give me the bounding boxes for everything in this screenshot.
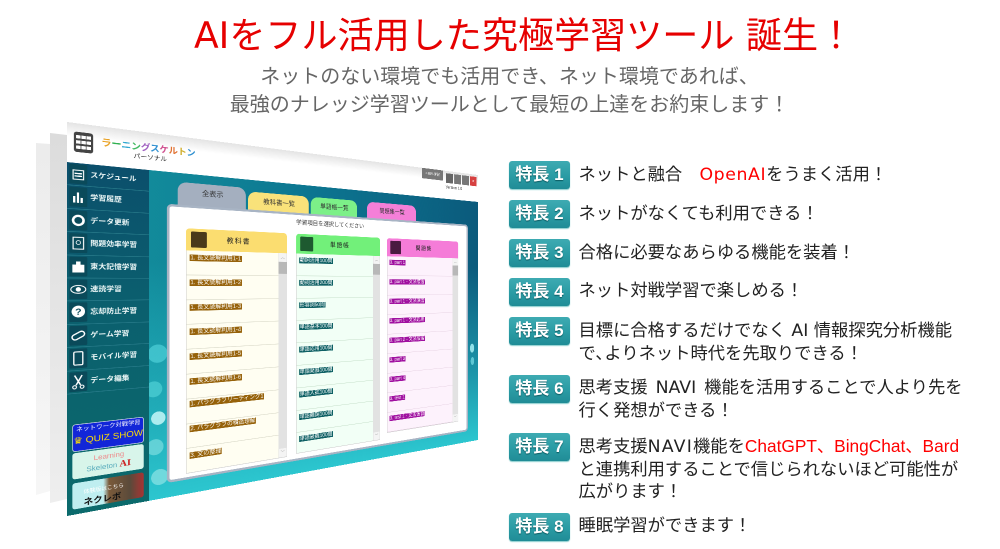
menu item: data update: データ更新 xyxy=(90,217,129,227)
app logo: パーソナル xyxy=(134,153,167,163)
tab: textbooks xyxy=(248,191,309,219)
column: questions: 3. part 2 - 文法復習 xyxy=(390,336,425,343)
window buttons: × xyxy=(472,178,475,184)
bokeh lights xyxy=(149,344,474,485)
feature 6 text xyxy=(578,378,963,421)
column header xyxy=(387,238,458,258)
feature 2 badge: 特長 2 xyxy=(515,204,564,223)
banner: nextlevel labo: 体験版はこちら xyxy=(84,482,124,495)
title: AIをフル活用した究極学習ツール 誕生！ xyxy=(194,15,854,57)
tab: all: 全表示 xyxy=(202,189,223,199)
banner: quiz show: ネットワーク対戦学習 xyxy=(76,419,140,433)
column: questions: ︿ xyxy=(454,260,457,264)
column: questions: 3. part 3 xyxy=(390,356,405,363)
column: textbooks: 1. 長文読解利用1-2 xyxy=(190,279,241,286)
window buttons: Version 1.0 xyxy=(446,185,462,191)
menu item: forget prevention: 忘却防止学習 xyxy=(90,307,137,316)
app screenshot window xyxy=(67,122,478,516)
feature 6 text: 思考支援 NAVI 機能を活用することで人より先を xyxy=(578,378,963,398)
menu item: history: 学習履歴 xyxy=(90,194,122,204)
feature 1 badge: 特長 1 xyxy=(515,165,564,184)
feature 5 text: で､よりネット時代を先取りできる！ xyxy=(578,344,863,364)
column: questions: 3. part 1 - 文法演習 xyxy=(390,298,425,304)
tab: references: 単語帳一覧 xyxy=(320,202,348,212)
subtitle xyxy=(230,66,789,116)
tab: references xyxy=(311,197,357,222)
column: textbooks: 1. 長文読解利用1-1 xyxy=(190,255,241,262)
main white panel xyxy=(167,204,468,483)
column header: 単語帳 xyxy=(330,241,350,249)
feature 5 badge xyxy=(509,317,570,345)
tab: questions: 問題集一覧 xyxy=(379,207,405,216)
feature 5 text: 目標に合格するだけでなく AI 情報探究分析機能 xyxy=(578,321,952,341)
column: textbooks: 1. 長文読解利用1-5 xyxy=(190,350,241,360)
feature 6 text: 行く発想ができる！ xyxy=(578,401,734,421)
feature 3 text: 合格に必要なあらゆる機能を装着！ xyxy=(578,243,855,263)
column: references: 形容詞50問 xyxy=(300,302,325,308)
feature 8 text: 睡眠学習ができます！ xyxy=(578,516,751,536)
column: references: ﹀ xyxy=(375,433,378,438)
menu item: schedule xyxy=(67,162,149,192)
menu item: game: ゲーム学習 xyxy=(90,330,129,339)
column: references: 単語最難100問 xyxy=(300,431,332,442)
feature 7 text xyxy=(578,436,959,502)
feature 1 badge xyxy=(509,161,570,189)
menu item: efficient study: 問題効率学習 xyxy=(90,240,137,249)
subtitle: ネットのない環境でも活用でき、ネット環境であれば、 xyxy=(260,66,759,88)
column: questions: 3. test 1 xyxy=(390,395,405,402)
column: references: 単語入試100問 xyxy=(300,388,332,397)
column: questions xyxy=(387,238,458,433)
feature 5 badge: 特長 5 xyxy=(515,321,564,340)
column: textbooks: 1. 長文読解利用1-4 xyxy=(190,327,241,335)
feature 8 badge xyxy=(509,513,570,541)
feature 2 text: ネットがなくても利用できる！ xyxy=(578,204,819,224)
column: textbooks: 1. 長文読解利用1-6 xyxy=(190,374,241,385)
menu item: forget prevention xyxy=(67,300,149,325)
menu item: data update xyxy=(67,209,149,235)
menu item: history xyxy=(67,185,149,213)
feature 5 text xyxy=(578,321,952,364)
title bar xyxy=(67,122,478,202)
menu item: schedule: スケジュール xyxy=(90,171,136,183)
menu item: memory: 東大記憶学習 xyxy=(90,263,137,271)
column: questions: 3. part 1 - 文法復習 xyxy=(390,279,425,285)
column: references: ︿ xyxy=(375,257,378,262)
column: references: 単語発展100問 xyxy=(300,366,332,375)
tab: all xyxy=(178,182,246,213)
menu item: game xyxy=(67,322,149,348)
feature 4 badge: 特長 4 xyxy=(515,282,564,301)
menu item: mobile xyxy=(67,344,149,371)
banner: learning skeleton AI xyxy=(72,444,144,480)
column: references: 動詞活用200問 xyxy=(300,280,332,286)
banner: nextlevel labo: ネクレボ xyxy=(84,491,121,507)
banner: quiz show xyxy=(72,417,144,452)
menu item: data edit: データ編集 xyxy=(90,374,129,384)
column: references: 単語応用100問 xyxy=(300,345,332,353)
feature 4 text: ネット対戦学習で楽しめる！ xyxy=(578,281,803,301)
column header xyxy=(296,234,380,256)
column header xyxy=(186,228,287,253)
feature 6 badge: 特長 6 xyxy=(515,379,564,398)
column: questions: 3. part 1 xyxy=(390,260,405,265)
banner: learning skeleton AI: Skeleton AI xyxy=(86,457,131,474)
column: questions: 3. part 4 xyxy=(390,375,405,382)
stacked window shadows xyxy=(36,133,67,503)
panel prompt: 学習項目を選択してください xyxy=(296,219,364,229)
menu item: data edit xyxy=(67,366,149,395)
column: questions: ﹀ xyxy=(454,415,457,420)
feature 1 text: ネットと融合 OpenAIをうまく活用！ xyxy=(578,165,887,185)
column: references: 単語難関100問 xyxy=(300,410,332,420)
menu item: efficient study xyxy=(67,232,149,257)
column header: 教科書 xyxy=(227,237,251,245)
feature 7 badge xyxy=(509,433,570,461)
banner: quiz show: ♛ QUIZ SHOW xyxy=(73,427,143,446)
column: textbooks: ︿ xyxy=(281,255,285,260)
feature 7 text: と連携利用することで信じられないほど可能性が xyxy=(578,460,958,480)
feature 8 badge: 特長 8 xyxy=(515,517,564,536)
feature 3 badge: 特長 3 xyxy=(515,243,564,262)
sidebar menu xyxy=(67,162,149,516)
menu item: speed reading xyxy=(67,278,149,302)
subtitle: 最強のナレッジ学習ツールとして最短の上達をお約束します！ xyxy=(230,94,789,116)
column: references: 動詞活用100問 xyxy=(300,257,332,264)
menu item: speed reading: 速読学習 xyxy=(90,285,122,293)
tab: textbooks: 教科書一覧 xyxy=(263,198,295,208)
column: textbooks xyxy=(186,228,287,474)
window buttons xyxy=(422,168,476,191)
tab: questions xyxy=(367,202,416,226)
column: textbooks: 1. 長文読解利用1-3 xyxy=(190,303,241,311)
feature 7 text: 広がります！ xyxy=(578,482,682,502)
feature 7 text: 思考支援NAVI機能をChatGPT、BingChat、Bard xyxy=(578,436,959,457)
column: textbooks: 2. パラグラフの構造理解 xyxy=(190,417,255,432)
tabs xyxy=(178,182,416,221)
column: textbooks: ﹀ xyxy=(281,450,285,455)
column header: 問題集 xyxy=(416,245,432,252)
menu item: mobile: モバイル学習 xyxy=(90,351,137,362)
column: references xyxy=(296,234,380,454)
column: questions: 3. part 1 - 文法応用 xyxy=(390,317,425,324)
app logo: ラーニングスケルトン xyxy=(101,138,195,159)
menu item: memory xyxy=(67,255,149,279)
window buttons: <-BR-学習 xyxy=(425,171,440,177)
feature 4 badge xyxy=(509,278,570,306)
banner: nextlevel labo xyxy=(72,472,144,510)
column: textbooks: 1. パラグラフリーディング1 xyxy=(190,393,263,407)
icon: app menu grid xyxy=(74,131,93,154)
column: questions: 3. test 1 - 文法復習 xyxy=(390,411,424,421)
feature 7 badge: 特長 7 xyxy=(515,437,564,456)
feature 6 badge xyxy=(509,375,570,403)
feature 2 badge xyxy=(509,200,570,228)
column: textbooks: 3. 文の整理 xyxy=(190,448,221,459)
column: references: 単語基本100問 xyxy=(300,323,332,330)
feature 3 badge xyxy=(509,239,570,267)
menu item: forget prevention: ? xyxy=(76,310,83,321)
banner: learning skeleton AI: Learning xyxy=(94,450,124,462)
